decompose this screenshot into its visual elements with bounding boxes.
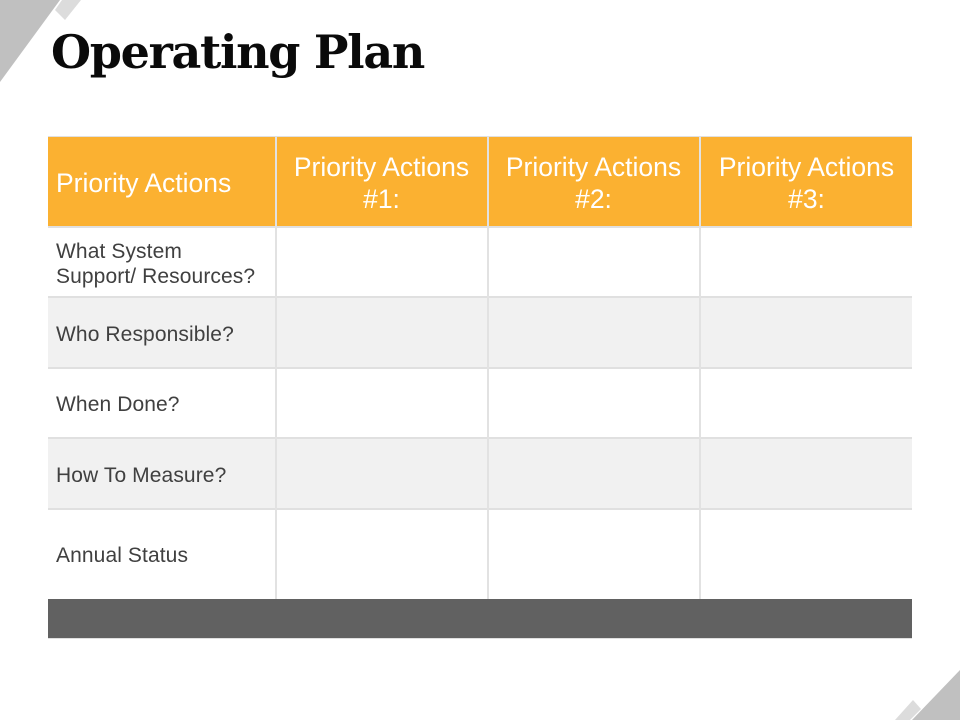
header: priority actions 1 [294, 152, 469, 214]
row label: what system support [56, 240, 255, 288]
header: priority actions 1: #1: [363, 184, 400, 214]
row label: when done: When Done? [56, 393, 180, 416]
header: priority actions 3 [719, 152, 894, 214]
header: priority actions 1: Priority Actions [294, 152, 469, 182]
row label: annual status: Annual Status [56, 544, 188, 567]
footer band [48, 599, 912, 638]
title: Operating Plan [51, 25, 424, 79]
header band [48, 137, 912, 227]
row label: how to measure: How To Measure? [56, 464, 226, 487]
header: priority actions 3: #3: [788, 184, 825, 214]
row label: who responsible: Who Responsible? [56, 323, 234, 346]
row label: what system support: What System [56, 240, 182, 263]
row band: who responsible [48, 297, 912, 368]
header: priority actions 2: #2: [575, 184, 612, 214]
header: priority actions 2: Priority Actions [506, 152, 681, 182]
decorative corner: bottom right [895, 670, 960, 720]
decorative corner: top left [0, 0, 81, 82]
row band: how to measure [48, 439, 912, 509]
header: priority actions 3: Priority Actions [719, 152, 894, 182]
header: priority actions 2 [506, 152, 681, 214]
row label: what system support: Support/ Resources? [56, 265, 255, 288]
header: priority actions: Priority Actions [56, 168, 231, 198]
